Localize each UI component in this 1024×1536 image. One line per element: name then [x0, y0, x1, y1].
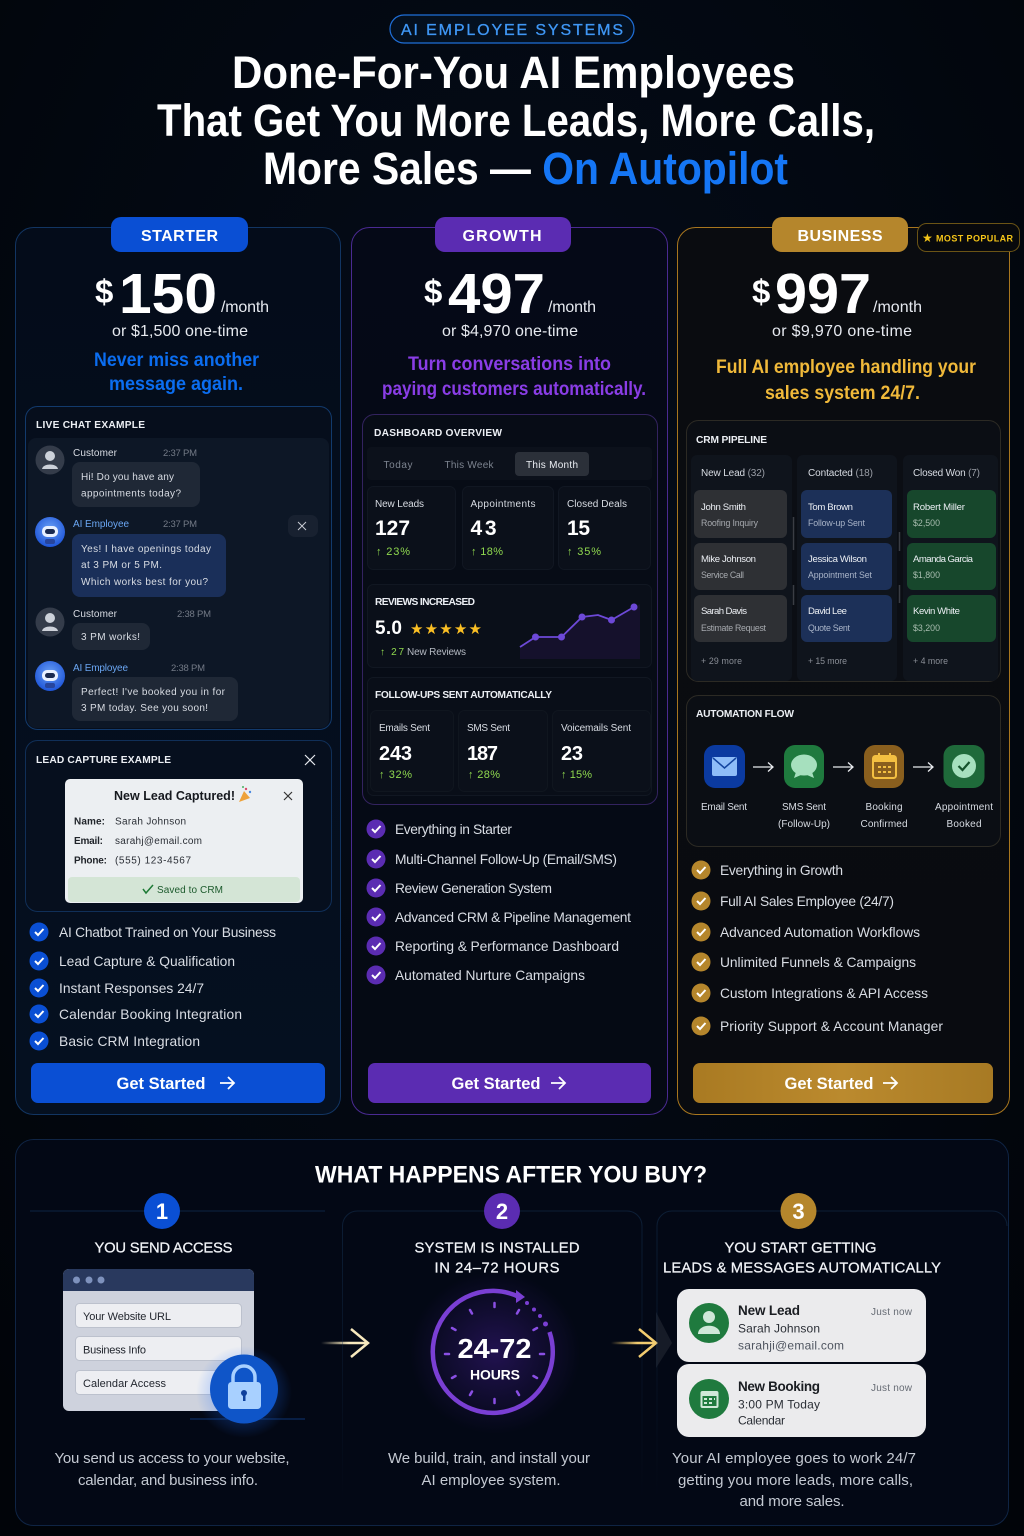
panel: growth plan [352, 217, 668, 1114]
starter price: 150 [119, 262, 217, 326]
stat: sms sent [458, 710, 548, 792]
growth tagline: paying customers automatically. [382, 379, 646, 400]
column: contacted: Tom Brown [808, 502, 853, 513]
growth tagline [382, 354, 646, 400]
panel: business plan [678, 217, 1020, 1114]
lead card: New Lead Captured! [114, 789, 235, 803]
column: new lead [691, 455, 792, 681]
customer message 2: 2:38 PM [177, 609, 211, 620]
notification: new lead: sarahji@email.com [738, 1338, 844, 1352]
clock 24-72 hours [410, 1272, 580, 1434]
step: booking confirmed: Booking [866, 802, 902, 813]
starter feature list [30, 922, 276, 1050]
business price: $ [752, 273, 770, 310]
panel: live chat example [26, 406, 332, 730]
heading: step 3: YOU START GETTING [724, 1240, 876, 1256]
panel: follow-ups sent [368, 678, 652, 796]
panel: crm pipeline: CRM PIPELINE [696, 435, 767, 446]
customer message 1: Hi! Do you have any [81, 472, 174, 483]
notification: new booking: Calendar [738, 1414, 785, 1428]
tabs: Today [384, 460, 412, 471]
form window [63, 1269, 254, 1411]
lead card: Email: [74, 836, 103, 847]
growth price: /month [548, 299, 596, 316]
lead card: sarahj@email.com [115, 836, 202, 847]
lead card: Name: [74, 816, 105, 828]
starter feature list: Basic CRM Integration [59, 1034, 200, 1049]
stat: sms sent: 187 [467, 743, 498, 765]
stat: closed deals: ↑ 35% [567, 546, 601, 558]
ai message 2: 3 PM today. See you soon! [81, 703, 208, 714]
starter button: Get Started [116, 1075, 206, 1093]
stat: closed deals: 15 [567, 517, 590, 540]
customer message 1: appointments today? [81, 488, 181, 500]
column: contacted: Jessica Wilson [808, 554, 867, 565]
badge: 2 [484, 1193, 520, 1229]
column: new lead: John Smith [701, 502, 746, 513]
description: step 3 [672, 1450, 916, 1510]
growth price: $ [424, 273, 442, 310]
step: appointment booked: Booked [946, 819, 982, 830]
customer message 2: 3 PM works! [81, 632, 140, 643]
starter pill [111, 217, 248, 252]
column: closed won: Kevin White [913, 606, 960, 617]
notification: new lead: New Lead [738, 1303, 800, 1318]
business price: 997 [775, 262, 871, 326]
icon: lock [190, 1346, 305, 1438]
notification: new booking [677, 1364, 926, 1437]
badge: 3: 3 [792, 1199, 805, 1224]
most popular badge: ★ [922, 231, 933, 245]
notification: new lead: Just now [871, 1307, 913, 1318]
column: new lead: Service Call [701, 570, 744, 580]
title: Done-For-You AI Employees [232, 47, 795, 98]
stat: new leads [368, 486, 456, 570]
business feature list: Priority Support & Account Manager [720, 1019, 943, 1034]
lead card: Sarah Johnson [115, 816, 186, 828]
column: contacted [797, 455, 897, 681]
stat: voicemails sent: 23 [561, 743, 583, 765]
growth feature list: Advanced CRM & Pipeline Management [395, 910, 631, 925]
customer message 1: 2:37 PM [163, 448, 197, 459]
column: closed won: Robert Miller [913, 502, 966, 513]
growth price: 497 [448, 262, 545, 326]
most popular badge: MOST POPULAR [936, 234, 1014, 244]
column: closed won: $3,200 [913, 623, 940, 633]
starter price: /month [221, 299, 269, 316]
growth feature list: Reporting & Performance Dashboard [395, 939, 619, 954]
column: new lead: + 29 more [701, 656, 742, 666]
growth feature list: Multi-Channel Follow-Up (Email/SMS) [395, 852, 617, 867]
title [157, 47, 875, 194]
ai message 1: Yes! I have openings today [81, 544, 211, 555]
icon: party popper [239, 786, 251, 802]
step 2 [342, 1193, 642, 1500]
column: contacted: Contacted (18) [808, 468, 873, 479]
business tagline [716, 357, 977, 404]
panel: automation flow: AUTOMATION FLOW [696, 709, 794, 720]
column: closed won: $2,500 [913, 518, 940, 528]
stat: sms sent: ↑ 28% [468, 769, 500, 781]
stat: emails sent: 243 [379, 743, 412, 765]
stat: sms sent: SMS Sent [467, 723, 510, 734]
starter feature list: AI Chatbot Trained on Your Business [59, 925, 276, 940]
growth price: or $4,970 one-time [442, 323, 578, 340]
business feature list: Everything in Growth [720, 863, 843, 878]
column: new lead: Mike Johnson [701, 554, 756, 565]
column: closed won: Closed Won (7) [913, 468, 980, 479]
notification: new booking: Just now [871, 1383, 913, 1394]
stat: voicemails sent: Voicemails Sent [561, 723, 631, 734]
panel: what happens after you buy [16, 1140, 1008, 1526]
growth tagline: Turn conversations into [408, 354, 611, 375]
line chart: reviews [520, 604, 640, 659]
arrow [753, 762, 773, 772]
starter pill: STARTER [141, 228, 218, 245]
panel: follow-ups sent: FOLLOW-UPS SENT AUTOMATICALLY [375, 690, 552, 701]
step: email sent [701, 745, 747, 813]
customer message 2 [36, 608, 211, 650]
panel: reviews increased: ↑ 27 [380, 647, 404, 658]
step: booking confirmed [860, 745, 908, 830]
starter price: $ [95, 273, 113, 310]
growth button [368, 1063, 651, 1103]
growth price [424, 262, 596, 340]
clock 24-72 hours: HOURS [470, 1366, 520, 1382]
business button: Get Started [784, 1075, 874, 1093]
tabs: This Month [526, 460, 578, 471]
growth button: Get Started [452, 1075, 540, 1093]
column: contacted: Quote Sent [808, 623, 851, 633]
ai message 1: AI Employee [73, 519, 129, 530]
arrow [913, 762, 933, 772]
eyebrow badge: AI EMPLOYEE SYSTEMS [401, 22, 623, 39]
arrow: step 1 to 2 [321, 1329, 368, 1357]
badge: 2: 2 [496, 1199, 508, 1224]
business feature list: Unlimited Funnels & Campaigns [720, 955, 916, 970]
badge: 3 [780, 1193, 816, 1229]
stat: emails sent [370, 710, 454, 792]
stat: emails sent: Emails Sent [379, 723, 430, 734]
column: contacted: Appointment Set [808, 570, 873, 580]
panel: automation flow [686, 696, 1000, 846]
panel: lead capture example [26, 740, 332, 912]
column: contacted: Follow-up Sent [808, 518, 866, 528]
notification: new booking: New Booking [738, 1379, 820, 1394]
panel: crm pipeline [686, 420, 1000, 682]
title: That Get You More Leads, More Calls, [157, 95, 875, 146]
description: step 2: AI employee system. [422, 1472, 560, 1489]
title: More Sales — On Autopilot [263, 143, 788, 194]
stat: appointments: ↑ 18% [471, 546, 503, 558]
ai message 2: 2:38 PM [171, 663, 205, 674]
starter tagline: Never miss another [94, 350, 260, 371]
badge: 1: 1 [156, 1199, 168, 1224]
column: new lead: Estimate Request [701, 623, 767, 633]
business button [693, 1063, 993, 1103]
step: sms sent [778, 745, 830, 830]
step: appointment booked [935, 745, 993, 830]
stat: new leads: New Leads [375, 499, 424, 510]
icon: close [305, 755, 315, 765]
tabs [367, 447, 652, 480]
stat: emails sent: ↑ 32% [379, 769, 412, 781]
stat: new leads: 127 [375, 517, 410, 540]
arrow [833, 762, 853, 772]
heading: step 3: LEADS & MESSAGES AUTOMATICALLY [663, 1260, 941, 1276]
stat: new leads: ↑ 23% [376, 546, 410, 558]
stat: appointments: Appointments [470, 499, 536, 510]
column: new lead: Sarah Davis [701, 606, 747, 617]
description: step 1 [54, 1450, 290, 1489]
step: sms sent: (Follow-Up) [778, 819, 830, 830]
icon: close card [284, 792, 292, 800]
lead card: Phone: [74, 856, 107, 866]
starter feature list: Lead Capture & Qualification [59, 954, 235, 969]
description: step 1: calendar, and business info. [78, 1472, 258, 1489]
panel: reviews increased: REVIEWS INCREASED [375, 597, 475, 608]
column: closed won: Amanda Garcia [913, 554, 974, 565]
most popular badge [918, 224, 1020, 252]
business tagline: sales system 24/7. [765, 383, 920, 404]
step 3 [657, 1193, 1007, 1510]
business price: /month [873, 299, 922, 316]
customer message 2: Customer [73, 609, 118, 620]
ai message 1: Which works best for you? [81, 577, 208, 588]
ai message 1: 2:37 PM [163, 519, 197, 530]
panel: reviews increased [368, 584, 652, 668]
lead card: (555) 123-4567 [115, 856, 191, 866]
notification: new lead: Sarah Johnson [738, 1322, 820, 1336]
step: sms sent: SMS Sent [782, 802, 826, 813]
growth feature list [366, 820, 631, 984]
column: contacted: + 15 more [808, 656, 847, 666]
starter tagline: message again. [109, 374, 243, 395]
panel: reviews increased: 5.0 [375, 618, 402, 639]
step: booking confirmed: Confirmed [860, 819, 908, 830]
description: step 2 [388, 1450, 590, 1489]
heading: lead capture: LEAD CAPTURE EXAMPLE [36, 755, 171, 766]
ai message 1 [35, 517, 226, 597]
business pill [772, 217, 908, 252]
lead card: Saved to CRM [157, 885, 223, 896]
heading: step 3 [663, 1240, 941, 1276]
stat: voicemails sent: ↑ 15% [561, 769, 592, 781]
stat: voicemails sent [552, 710, 650, 792]
step 1 [30, 1193, 325, 1489]
growth feature list: Everything in Starter [395, 822, 512, 837]
panel: dashboard overview [362, 414, 658, 804]
heading: step 2: IN 24–72 HOURS [434, 1260, 560, 1276]
lead card [65, 779, 303, 903]
notification: new booking: 3:00 PM Today [738, 1398, 820, 1412]
heading: step 2 [414, 1240, 580, 1276]
notification: new lead [677, 1289, 926, 1362]
form window: Calendar Access [83, 1378, 166, 1390]
column: closed won: $1,800 [913, 570, 940, 580]
form window: Business Info [83, 1344, 146, 1356]
column: new lead: Roofing Inquiry [701, 518, 759, 528]
clock 24-72 hours: 24-72 [458, 1333, 532, 1364]
column: closed won: + 4 more [913, 656, 948, 666]
panel: reviews increased: New Reviews [407, 647, 466, 658]
description: step 2: We build, train, and install your [388, 1450, 590, 1467]
growth feature list: Automated Nurture Campaigns [395, 968, 585, 983]
business feature list: Custom Integrations & API Access [720, 986, 928, 1001]
badge: 1 [144, 1193, 180, 1229]
panel: reviews increased: ★★★★★ [410, 621, 482, 638]
ai message 2: Perfect! I've booked you in for [81, 687, 226, 698]
business feature list: Full AI Sales Employee (24/7) [720, 894, 894, 909]
starter feature list: Calendar Booking Integration [59, 1007, 242, 1022]
form window: Your Website URL [83, 1311, 171, 1323]
arrow: step 2 to 3 [611, 1312, 672, 1368]
ai message 2: AI Employee [73, 663, 128, 674]
tabs: This Week [444, 460, 494, 471]
column: new lead: New Lead (32) [701, 468, 765, 479]
business feature list: Advanced Automation Workflows [720, 925, 920, 940]
stat: closed deals: Closed Deals [567, 499, 627, 510]
description: step 3: getting you more leads, more calls, [678, 1472, 913, 1489]
business feature list [692, 860, 943, 1036]
growth feature list: Review Generation System [395, 881, 552, 896]
business tagline: Full AI employee handling your [716, 357, 977, 378]
stat: appointments [462, 486, 554, 570]
stat: appointments: 43 [470, 517, 496, 540]
eyebrow badge [390, 15, 634, 43]
customer message 1 [36, 446, 200, 507]
step: appointment booked: Appointment [935, 802, 993, 813]
heading: dashboard: DASHBOARD OVERVIEW [374, 428, 502, 439]
starter price: or $1,500 one-time [112, 323, 248, 340]
customer message 1: Customer [73, 448, 118, 459]
step: email sent: Email Sent [701, 802, 747, 813]
growth pill: GROWTH [462, 228, 542, 245]
ai message 1: at 3 PM or 5 PM. [81, 560, 162, 571]
starter feature list: Instant Responses 24/7 [59, 981, 204, 996]
heading: step 1: YOU SEND ACCESS [94, 1240, 233, 1256]
growth pill [435, 217, 571, 252]
column: closed won [903, 455, 998, 681]
heading: after you buy: WHAT HAPPENS AFTER YOU BUY? [315, 1162, 707, 1188]
business price: or $9,970 one-time [772, 323, 912, 340]
description: step 3: and more sales. [740, 1493, 844, 1510]
starter price [95, 262, 269, 340]
heading: live chat: LIVE CHAT EXAMPLE [36, 420, 145, 431]
starter tagline [94, 350, 260, 395]
icon: close chat [288, 515, 318, 537]
description: step 1: You send us access to your website, [54, 1450, 290, 1467]
stat: closed deals [558, 486, 650, 570]
description: step 3: Your AI employee goes to work 24/7 [672, 1450, 916, 1467]
panel: starter plan [16, 217, 340, 1114]
business pill: BUSINESS [798, 228, 883, 245]
heading: step 2: SYSTEM IS INSTALLED [414, 1240, 580, 1256]
business price [752, 262, 922, 340]
ai message 2 [35, 661, 238, 721]
column: contacted: David Lee [808, 606, 847, 617]
starter button [31, 1063, 325, 1103]
